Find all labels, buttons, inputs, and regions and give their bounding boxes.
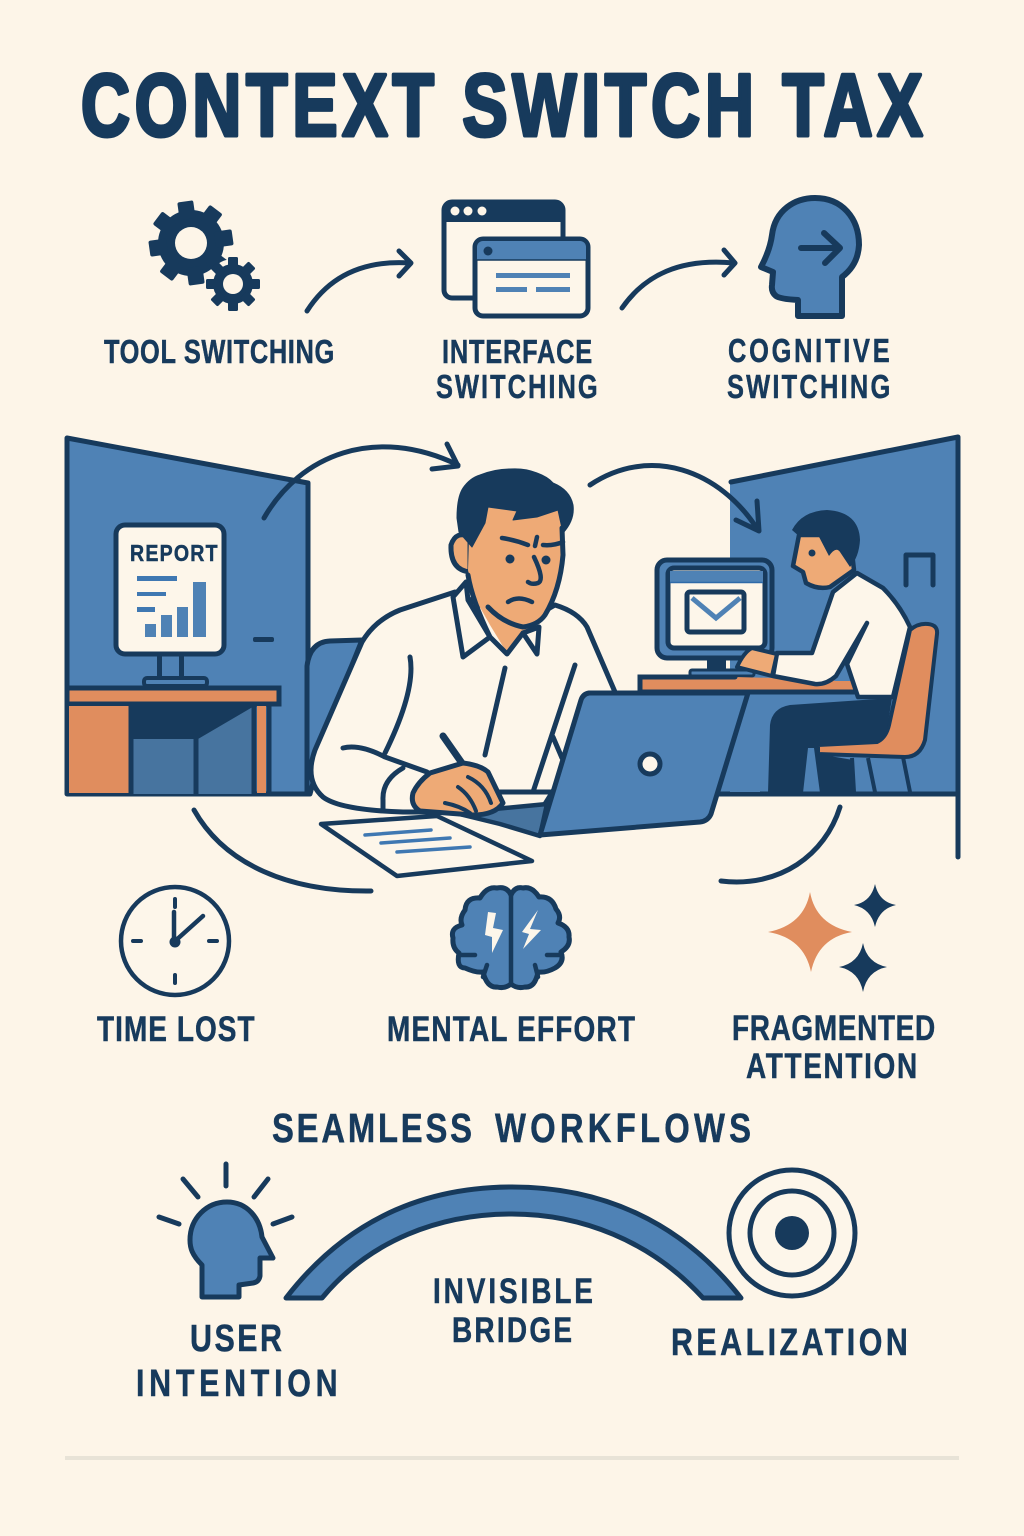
- icon: clock: [121, 887, 229, 995]
- heading: seamless workflows: SEAMLESS: [272, 1104, 472, 1151]
- label: cognitive switching: [727, 333, 890, 406]
- label: time lost: TIME LOST: [97, 1009, 255, 1049]
- icon: brain: [452, 888, 569, 988]
- bridge arc: [286, 1187, 741, 1298]
- icon: interface windows: [444, 202, 588, 316]
- icon: head with arrow: [761, 198, 859, 316]
- label: cognitive switching: SWITCHING: [727, 369, 890, 406]
- panel: left office wall: [67, 438, 308, 794]
- label: user intention: USER: [190, 1318, 282, 1360]
- arrow: tool to interface: [307, 251, 411, 311]
- trousers: [768, 698, 892, 793]
- arrow: lower left curve: [194, 810, 371, 891]
- laptop lid: [540, 693, 748, 835]
- label: invisible bridge: INVISIBLE: [433, 1271, 593, 1311]
- desk: [67, 688, 279, 794]
- section: switching types: [104, 198, 890, 406]
- label: interface switching: SWITCHING: [436, 369, 598, 406]
- face: [793, 535, 854, 588]
- label: interface switching: INTERFACE: [442, 334, 592, 371]
- ear: [451, 535, 470, 572]
- icon: target: [729, 1170, 855, 1296]
- facial features: [502, 537, 563, 602]
- label: interface switching: [436, 334, 598, 406]
- section: seamless flow: [136, 1164, 908, 1405]
- hand: [412, 763, 503, 815]
- label: invisible bridge: BRIDGE: [452, 1310, 572, 1350]
- report monitor: [116, 525, 224, 686]
- character: main person: [307, 469, 748, 876]
- label: fragmented attention: FRAGMENTED: [732, 1008, 935, 1048]
- shirt folds: [343, 657, 575, 810]
- arrow: interface to cognitive: [622, 250, 735, 308]
- hair: [457, 469, 573, 547]
- label: fragmented attention: ATTENTION: [746, 1046, 917, 1086]
- envelope: [687, 592, 744, 632]
- face and neck: [468, 505, 563, 653]
- hand: [737, 648, 777, 676]
- title: CONTEXT SWITCH TAX: [81, 56, 923, 155]
- label: tool switching: TOOL SWITCHING: [104, 334, 334, 371]
- laptop base: [455, 804, 547, 836]
- collar: [453, 575, 539, 657]
- heading: seamless workflows: WORKFLOWS: [495, 1104, 751, 1151]
- icon: head with idea rays: [159, 1164, 292, 1297]
- report monitor: REPORT: [130, 541, 218, 566]
- heading: seamless workflows: [272, 1104, 751, 1151]
- section: costs: [97, 884, 935, 1086]
- label: fragmented attention: [732, 1008, 935, 1086]
- label: user intention: INTENTION: [136, 1363, 338, 1405]
- label: user intention: [136, 1318, 338, 1405]
- desk: right: [640, 677, 855, 692]
- jaw outline: [488, 528, 563, 627]
- icon: gears: [148, 200, 260, 311]
- hair: [792, 510, 860, 567]
- torso and arm: [773, 573, 910, 697]
- illustration: office scene: [67, 437, 958, 891]
- panel: right office wall: [660, 437, 958, 857]
- office chair: [307, 640, 362, 794]
- blue gap under arm: [834, 666, 852, 681]
- arrow: report to person: [264, 444, 458, 518]
- pen: [443, 736, 464, 766]
- arrow: person to coworker: [590, 466, 759, 531]
- paper: [321, 816, 532, 876]
- label: realization: REALIZATION: [671, 1322, 908, 1364]
- arrow: lower right curve: [721, 807, 840, 882]
- character: seated coworker: [737, 510, 937, 793]
- icon: sparkles: [768, 884, 896, 992]
- email monitor: [657, 560, 772, 676]
- label: invisible bridge: [433, 1271, 593, 1350]
- chair: [818, 624, 937, 792]
- torso: [311, 592, 615, 812]
- label: mental effort: MENTAL EFFORT: [387, 1009, 636, 1049]
- label: cognitive switching: COGNITIVE: [728, 333, 890, 370]
